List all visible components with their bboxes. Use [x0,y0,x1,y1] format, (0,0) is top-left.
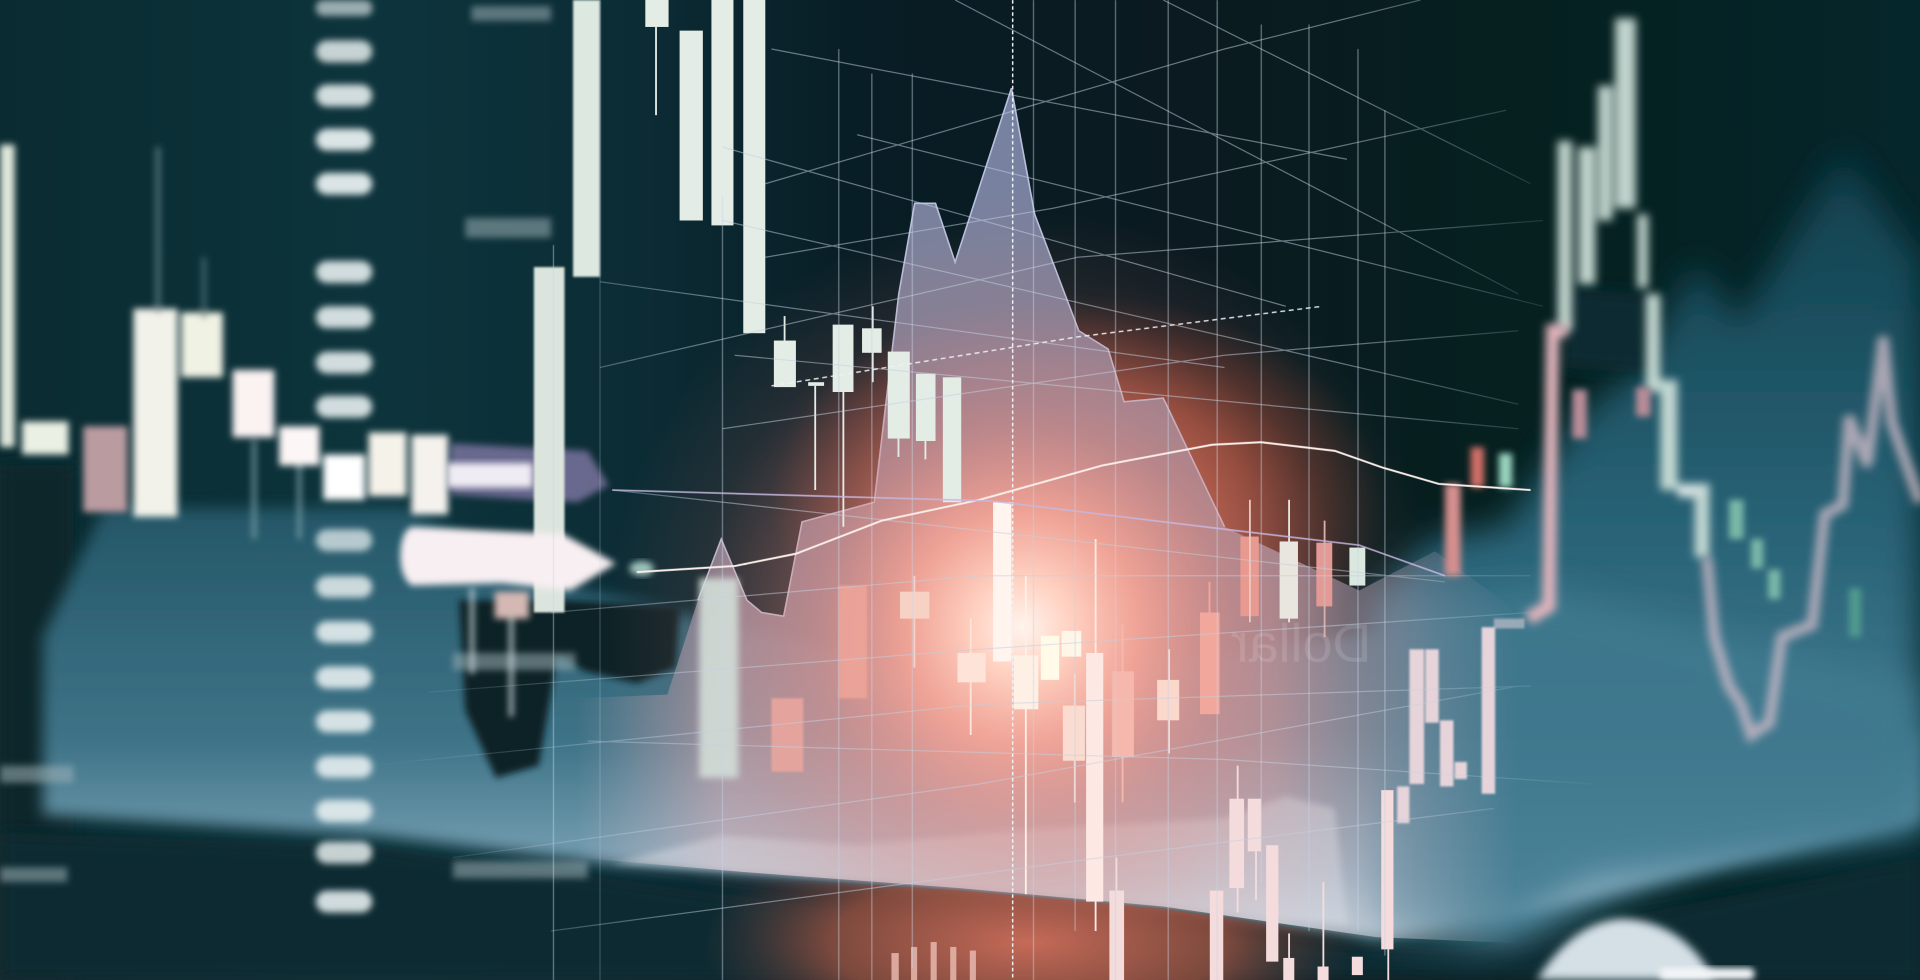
right teal mountain area [1371,153,1920,943]
purple blurred arrow [451,443,609,502]
right blurred pink stepped line [1528,331,1567,619]
white blob bottom right [1537,919,1714,980]
right descending and rising pink line [1707,337,1920,735]
bright pills at bottom edge [1659,968,1755,980]
purple trend line [612,490,1445,576]
tall blurred candles [534,0,600,612]
right blurred green candles [1558,18,1709,557]
dashed crosshair vertical [1012,0,1014,980]
white arrow label [400,527,616,590]
white bar inside purple arrow [447,463,533,488]
lower light ribbon [612,796,1347,925]
large central pale candle [699,578,738,778]
blurred lower right candles [1397,619,1524,823]
moving average line [637,442,1531,572]
red centre glow [606,211,1439,980]
dark blurred blob in area chart [459,600,680,778]
left blue area chart [43,508,1920,937]
small blurred green marker [629,561,654,576]
glow-side candles [771,500,1365,931]
bottom volume bars [891,942,976,980]
blurred faint labels [0,6,588,882]
bottom left dark band [0,833,1920,980]
dark pocket inside right peak [1561,288,1656,374]
perspective grid lines [367,0,1592,931]
blurred ladder of axis labels [316,0,372,913]
mirrored ghost text: Dollar [1231,613,1371,674]
left dark column [0,466,73,980]
upper sharp candles [645,0,961,527]
dashed crosshair horizontal [771,306,1322,386]
central mountain outline [698,88,1224,616]
lower right blue area [1371,588,1920,949]
lower candles [1109,766,1393,980]
central mountain area chart [576,88,1518,943]
small distant candles [1445,387,1861,637]
red background haze [771,294,1384,710]
bottom red reflection [698,877,1376,980]
vertical grid lines [553,0,1385,980]
left blurred candlesticks [0,145,529,717]
